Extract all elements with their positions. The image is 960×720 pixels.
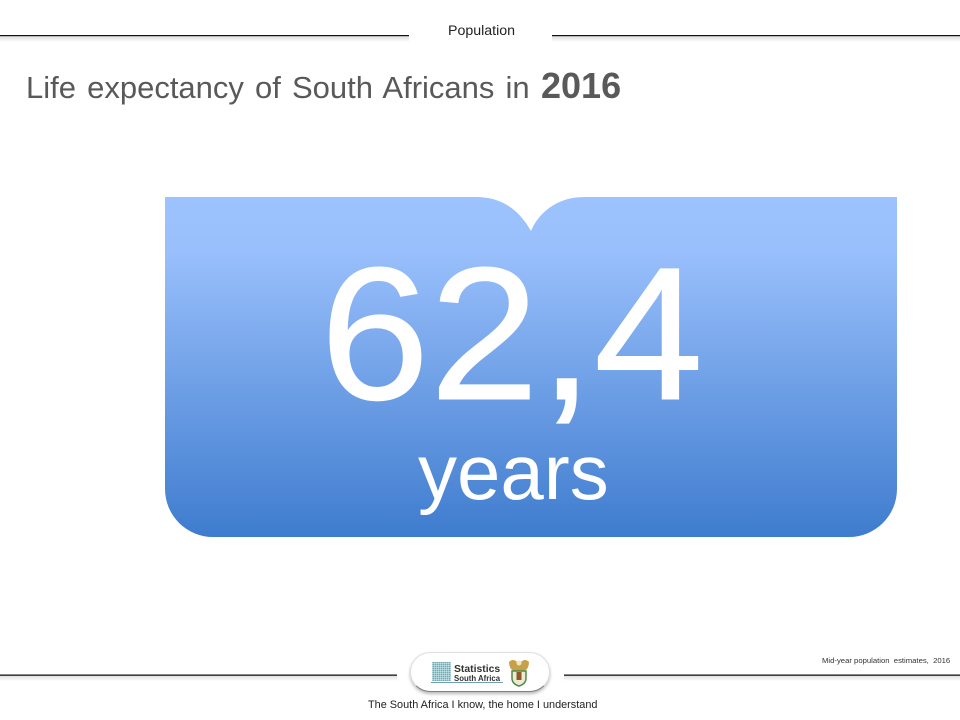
panel: life expectancy book shape [165, 197, 897, 537]
title: Life expectancy of South Africans in [26, 70, 530, 105]
icon: statistics building grid [432, 662, 451, 681]
section heading: Population: Population [448, 22, 515, 38]
unit: years: years [418, 428, 609, 516]
logo wordmark [454, 664, 500, 683]
logo underline [431, 682, 503, 683]
logo wordmark: South Africa [454, 674, 500, 683]
source note: Mid-year population estimates, 2016 [822, 656, 950, 665]
icon: coat of arms [509, 660, 529, 687]
logo badge: Statistics South Africa [410, 652, 550, 692]
logo wordmark: Statistics [454, 664, 500, 675]
title: 2016 [541, 65, 621, 106]
tagline: The South Africa I know, the home I understand [368, 699, 597, 711]
